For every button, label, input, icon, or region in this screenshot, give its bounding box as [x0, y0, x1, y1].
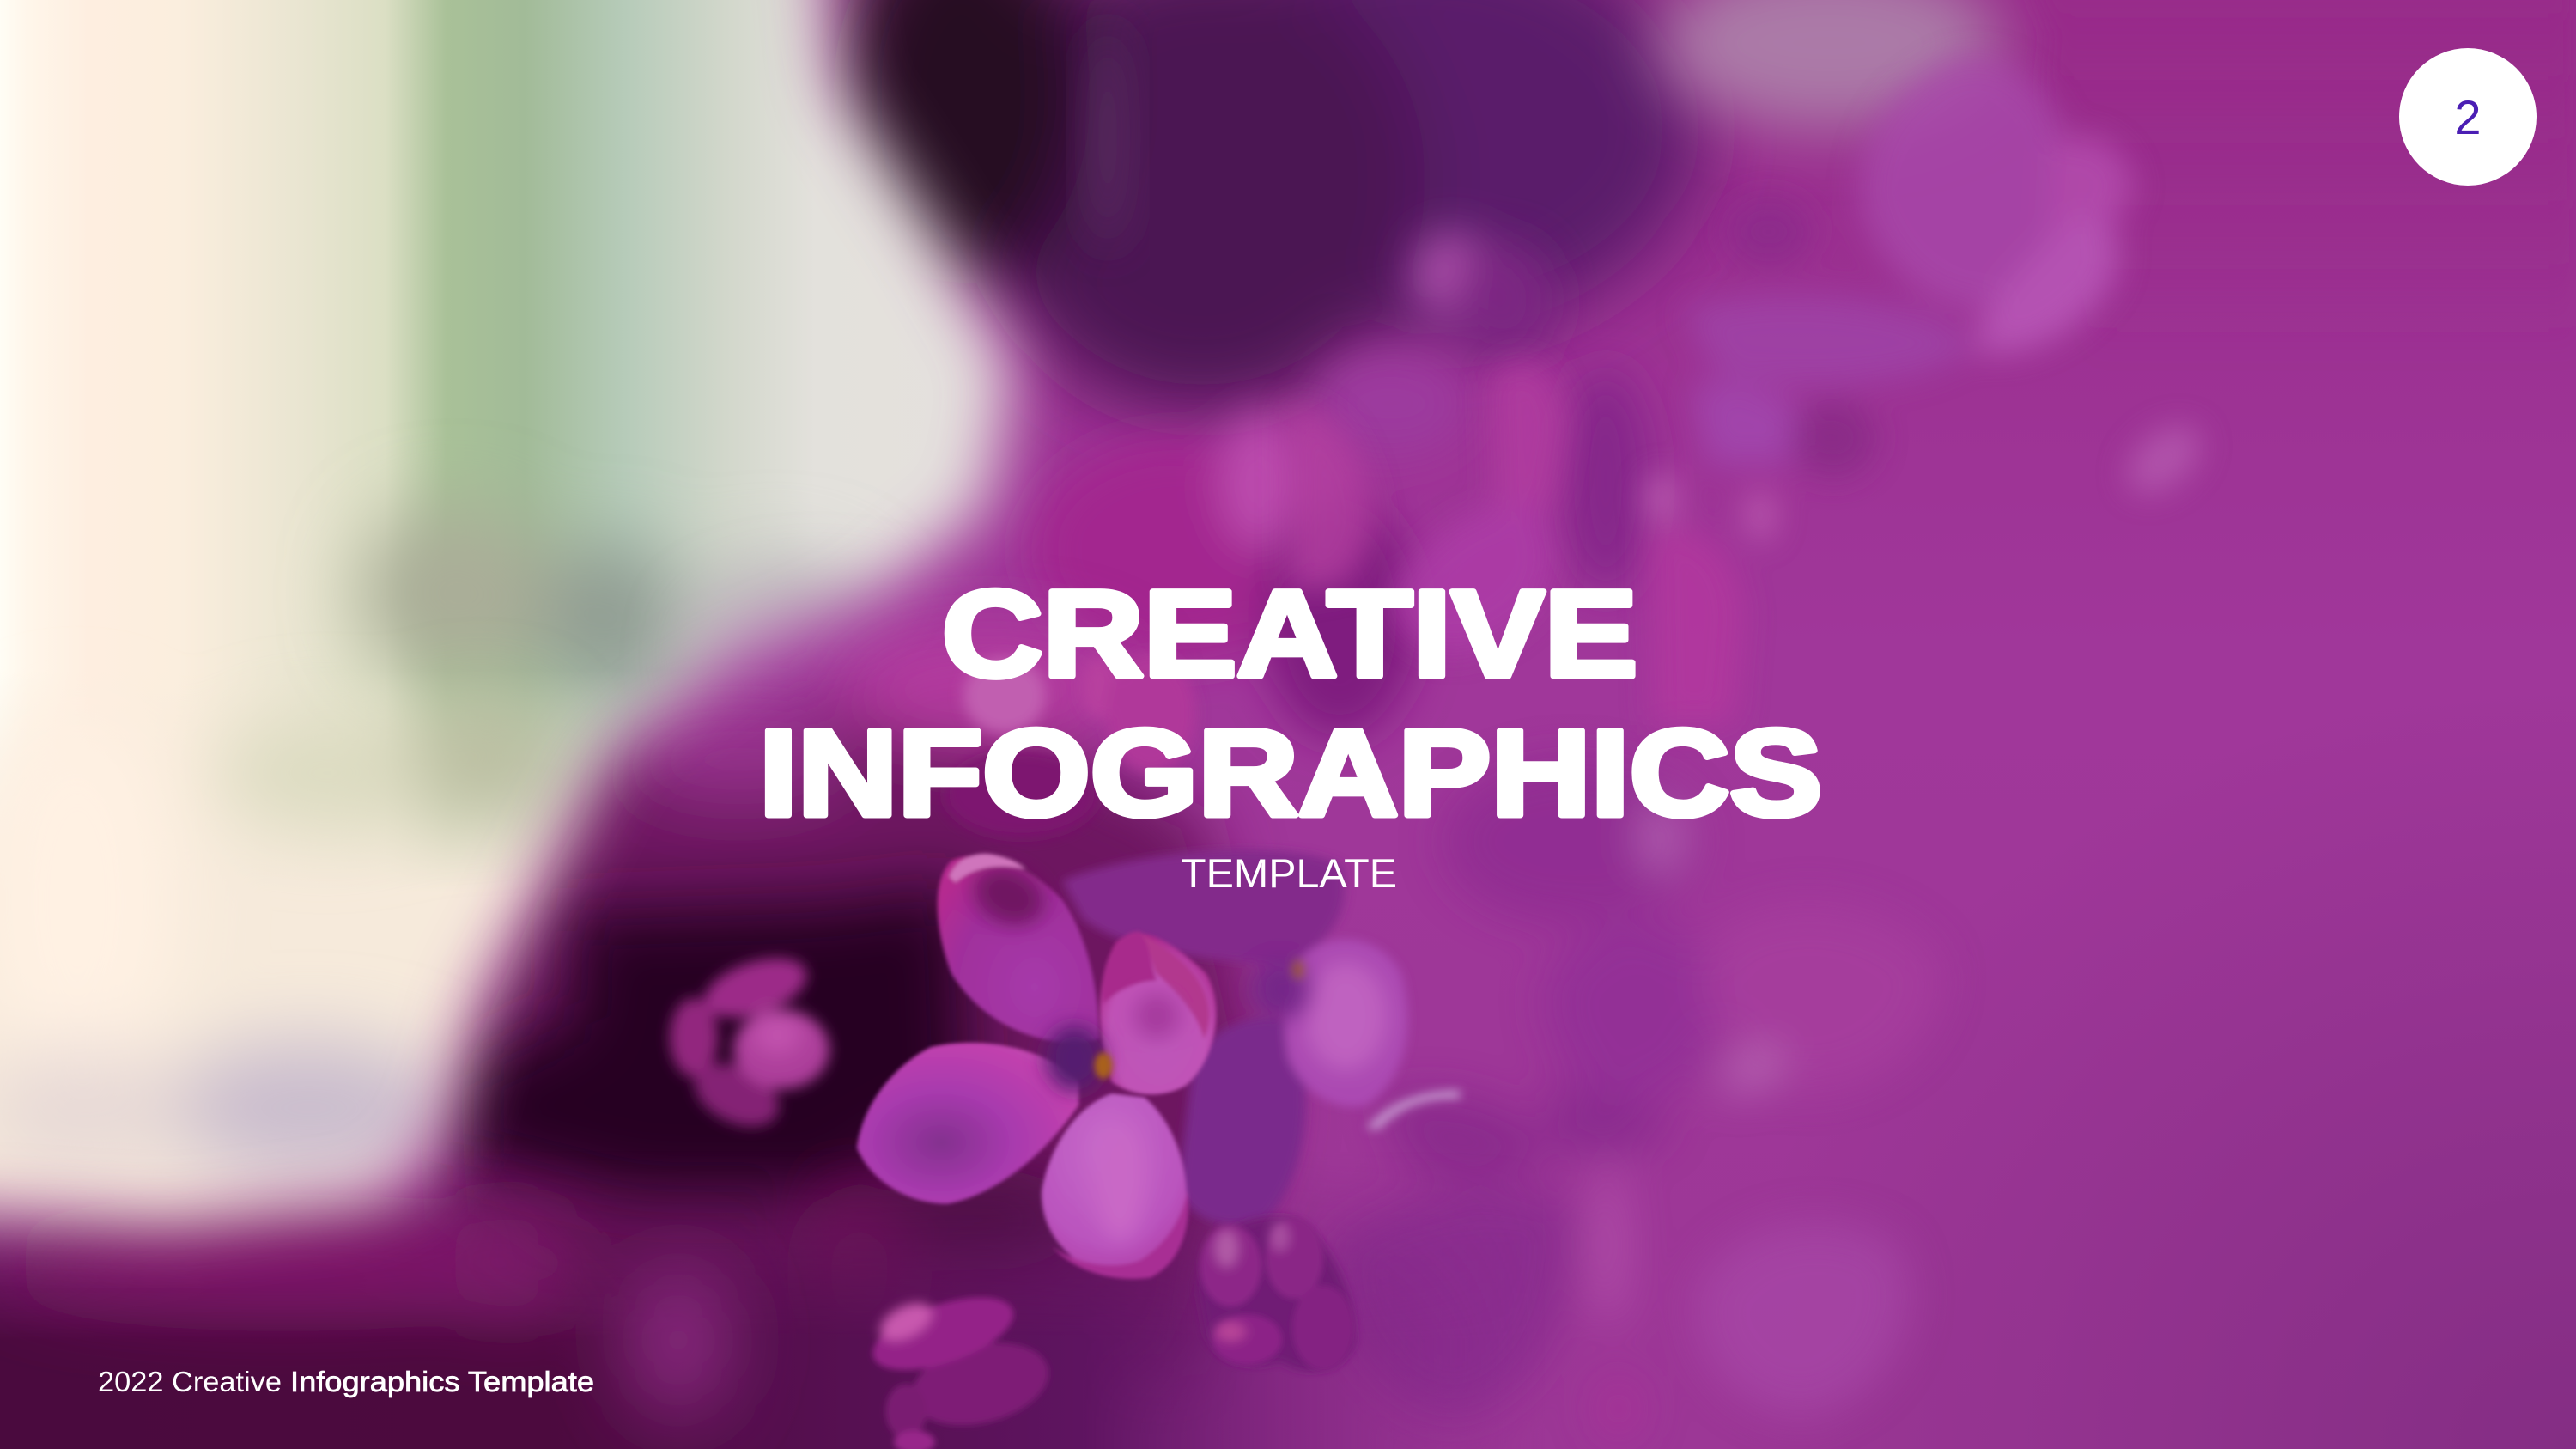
buds behind the title [945, 653, 1195, 837]
flower centre [1046, 1026, 1103, 1092]
title [759, 566, 1822, 842]
darkest shadows [464, 885, 1082, 1349]
pale background patch at top [1657, 0, 2001, 129]
pale window light on the left [0, 0, 1116, 1288]
magenta blooms below dark area [1030, 232, 1649, 739]
subtitle: TEMPLATE [1181, 850, 1397, 896]
right bud group [1198, 1217, 1354, 1371]
back flower [1062, 849, 1460, 1224]
lower-right ghost petals [1331, 760, 1941, 1443]
curled right petal [1100, 931, 1216, 1094]
title-zone petals and upper right flower [1288, 58, 2214, 725]
lower-left bud group [863, 1282, 1058, 1449]
footer bold part: Infographics Template [290, 1366, 594, 1397]
page number: 2 [2454, 90, 2482, 144]
page number badge [2399, 48, 2537, 186]
dark flower cluster [438, 627, 1271, 1391]
badge circle [2399, 48, 2537, 186]
title line 2: INFOGRAPHICS [759, 705, 1822, 842]
dark bottom band [0, 1178, 1434, 1449]
title line 1: CREATIVE [942, 566, 1637, 703]
dark top centre [833, 0, 1700, 412]
main lilac flower with buds [857, 849, 1460, 1449]
top petal [938, 854, 1099, 1044]
footer text [98, 1366, 594, 1397]
flower stamen [1094, 1052, 1112, 1079]
lower petal [1042, 1093, 1188, 1279]
footer regular part: 2022 Creative [98, 1366, 282, 1397]
left closed buds [670, 947, 829, 1139]
left petal [857, 1043, 1078, 1204]
